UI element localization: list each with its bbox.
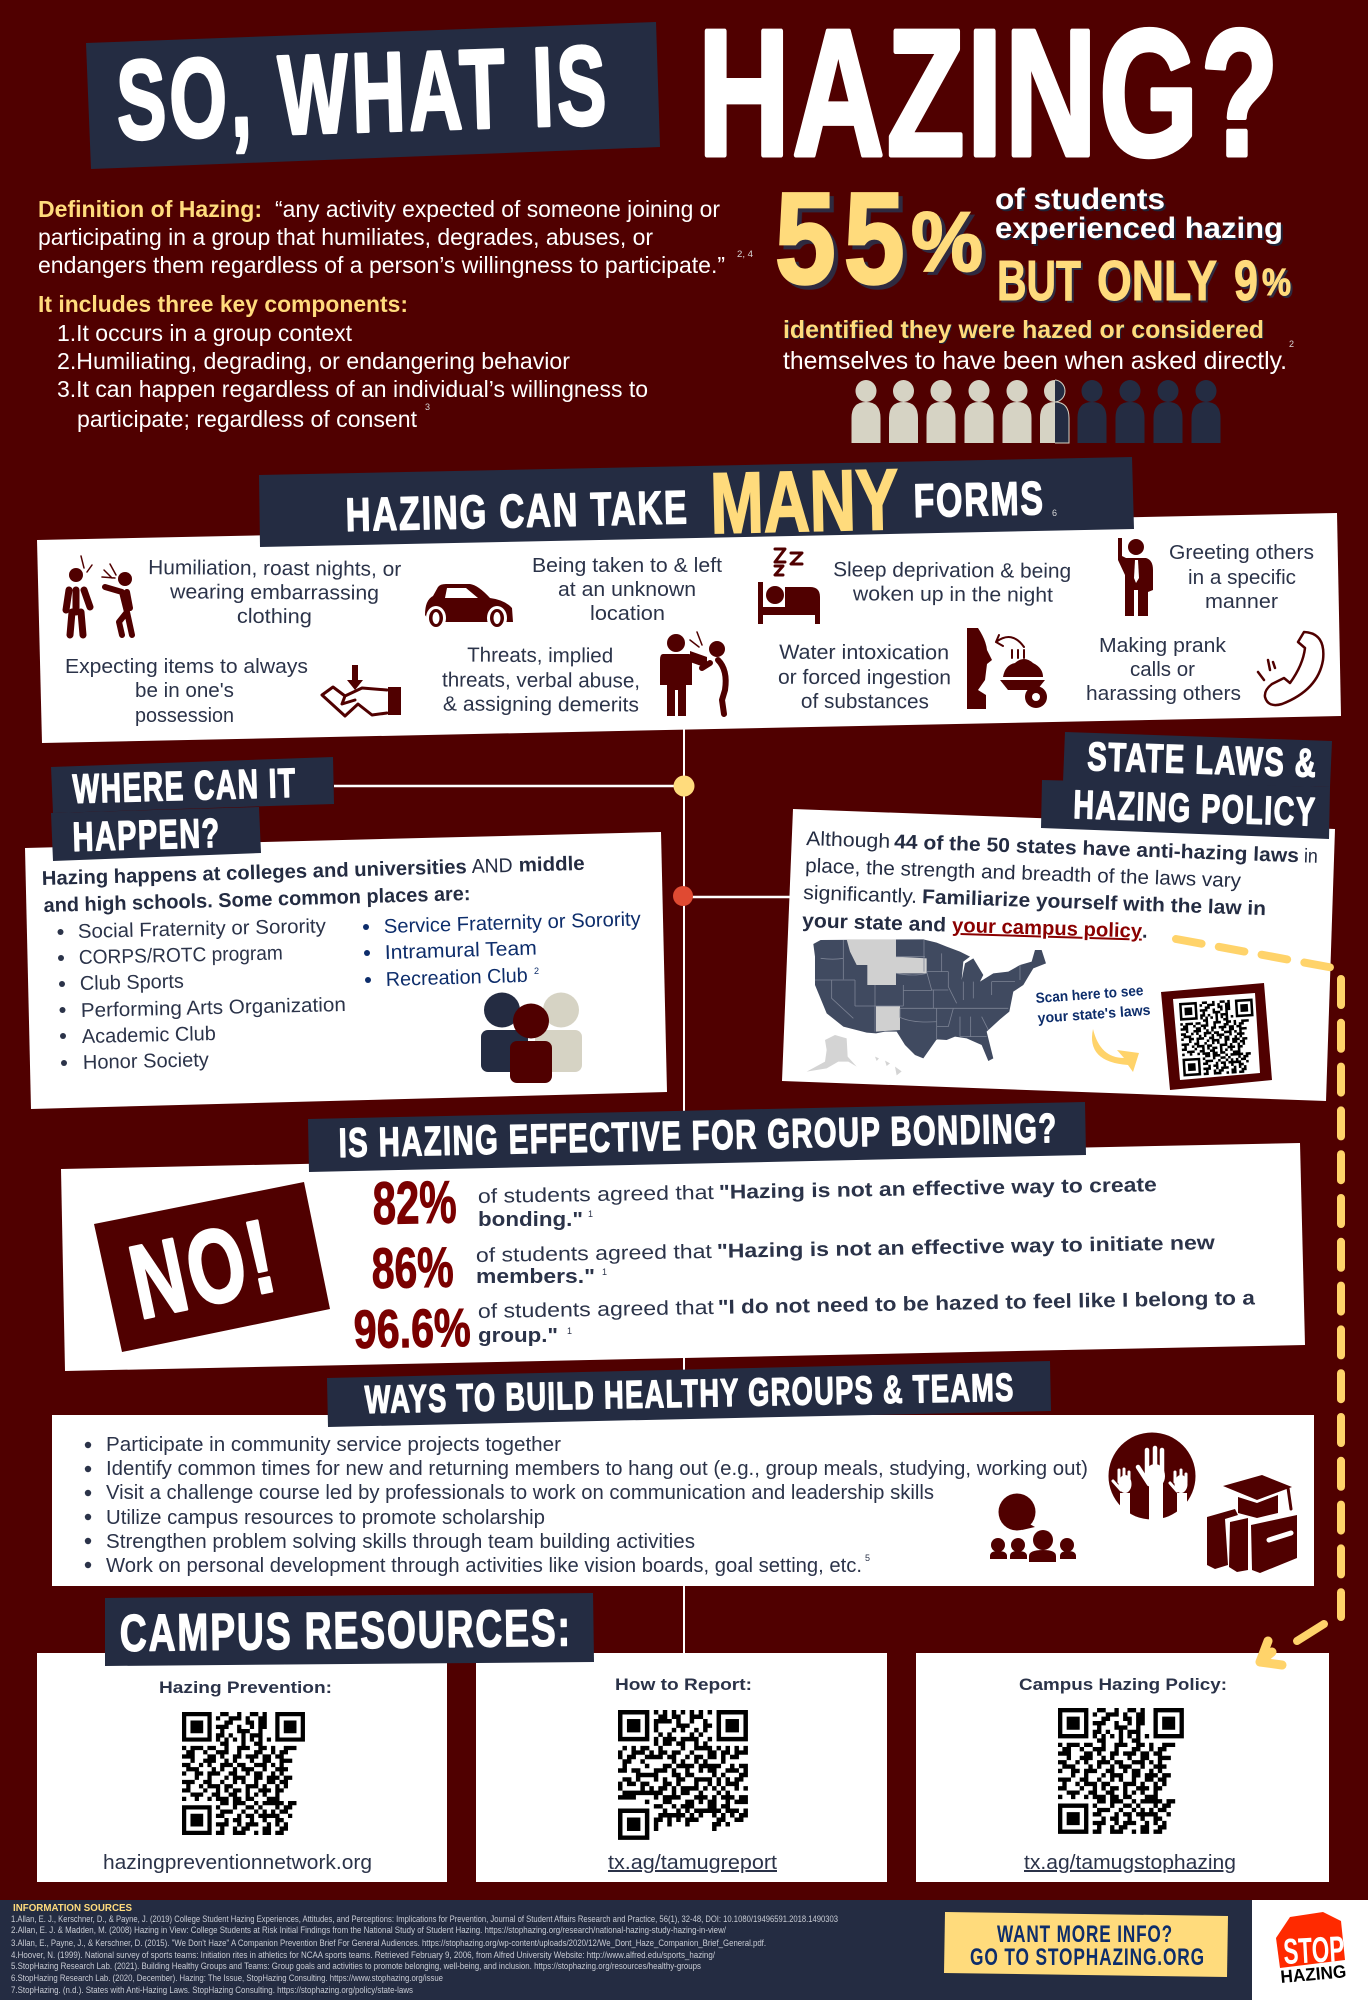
stat: 82 percent <box>372 1169 1157 1237</box>
text: scan prompt: Scan here to see <box>1035 983 1144 1007</box>
definition text block: participating in a group that humiliates, degrades, abuses, or <box>38 224 653 250</box>
panel: ways to build healthy groups <box>52 1361 1314 1586</box>
footer: information sources: 4.Hoover, N. (1999). National survey of sports teams: Initiation rites in athletics for NCAA sports teams. Retrieved February 9, 2006, from Alfred University Website: http://www.alfred.edu/sports_hazing/ <box>11 1950 715 1961</box>
statistic: 55 percent: 9 <box>1234 249 1258 313</box>
item: threats <box>442 643 640 717</box>
item: possession: Expecting items to always <box>65 655 308 678</box>
intro text <box>42 853 586 917</box>
item: sleep deprivation: woken up in the night <box>852 582 1053 607</box>
item: greeting: manner <box>1205 590 1278 613</box>
icon: person with megaphone <box>660 632 726 716</box>
definition text block <box>38 196 753 432</box>
card: hazing prevention: Hazing Prevention: <box>159 1678 332 1697</box>
body text: significantly. <box>803 882 918 908</box>
icon: telephone <box>1258 632 1323 705</box>
list: healthy group ideas <box>85 1434 1088 1577</box>
list: common places left: Honor Society <box>83 1049 209 1074</box>
item: humiliation <box>148 556 401 629</box>
list: common places right: 2 <box>534 966 539 976</box>
heading: where can it happen <box>51 757 334 861</box>
item: humiliation: Humiliation, roast nights, or <box>148 556 401 581</box>
callout: want more info <box>944 1912 1228 1977</box>
body text: your campus policy <box>952 915 1143 943</box>
item: possession: possession <box>135 704 234 727</box>
list: healthy group ideas: Work on personal development through activities like vision boards, goal setting, etc. <box>106 1555 862 1577</box>
icon: arguing people <box>66 556 132 635</box>
heading: healthy groups: WAYS TO BUILD HEALTHY GROUPS & TEAMS <box>364 1367 1015 1422</box>
item: threats: Threats, implied <box>467 644 613 667</box>
body text: 44 of the 50 states have anti-hazing laws <box>894 831 1299 867</box>
intro text: Hazing happens at colleges and universities <box>42 856 467 890</box>
card: hazing prevention <box>37 1653 447 1882</box>
list: common places left: Performing Arts Organization <box>81 994 346 1022</box>
list: common places right: Intramural Team <box>384 937 537 964</box>
item: water intoxication: or forced ingestion <box>778 666 951 689</box>
icon: raised hands <box>1108 1432 1196 1526</box>
list: common places right <box>363 908 641 991</box>
heading: state laws <box>1041 732 1332 839</box>
panel: is hazing effective <box>61 1102 1305 1371</box>
icon: speech bubble and group <box>990 1494 1076 1562</box>
heading: many forms: 6 <box>1052 508 1057 518</box>
stat: 96.6 percent: group." <box>478 1325 558 1347</box>
stat: 86 percent <box>371 1232 1215 1301</box>
footer: information sources <box>0 1900 1252 2000</box>
item: prank calls <box>1086 634 1241 705</box>
icon: graduation cap and books <box>1207 1475 1297 1573</box>
stat: 86 percent: 86% <box>371 1236 454 1301</box>
heading: campus resources <box>105 1593 594 1666</box>
heading: many forms: MANY <box>709 452 899 552</box>
item: unknown location: at an unknown <box>558 578 696 601</box>
stat: 96.6 percent: 1 <box>567 1326 572 1336</box>
icon: forced ingestion <box>967 628 1047 709</box>
item: water intoxication: Water intoxication <box>779 641 949 664</box>
panel: where can it happen <box>25 757 667 1109</box>
body text: place, the strength and breadth of the laws vary <box>805 855 1241 892</box>
intro text: middle <box>518 853 585 877</box>
item: water intoxication <box>778 641 951 713</box>
item: prank calls: harassing others <box>1086 682 1241 705</box>
stat: 96.6 percent: 96.6% <box>353 1298 471 1360</box>
heading: many forms <box>259 452 1134 552</box>
item: greeting: in a specific <box>1188 566 1296 589</box>
footer: information sources: 2.Allan, E. J. & Madden, M. (2008) Hazing in View: College Students at Risk Initial Findings from the National Study of Student Hazing. https://stophazing.org/research/national-hazing-study-hazing-in-view/ <box>11 1925 726 1936</box>
statistic: 55 percent: % <box>911 195 983 289</box>
stat: 82 percent: 1 <box>588 1209 593 1219</box>
card: campus hazing policy <box>916 1653 1329 1882</box>
statistic: 55 percent: experienced hazing <box>995 212 1283 245</box>
footer: information sources: 1.Allan, E. J., Kerschner, D., & Payne, J. (2019) College Student Hazing Experiences, Attitudes, and Perceptions: Implications for Prevention, Journal of Student Affairs Research and Practice, 56(1), 32-48, DOI: 10.1080/19496591.2018.1490303 <box>11 1914 838 1925</box>
heading: many forms: FORMS <box>913 471 1045 527</box>
statistic: 55 percent <box>775 166 1294 375</box>
panel: campus resources <box>37 1593 1329 1882</box>
statistic: 55 percent: themselves to have been when asked directly. <box>783 347 1287 375</box>
item: humiliation: wearing embarrassing <box>169 580 379 605</box>
heading: campus resources: CAMPUS RESOURCES: <box>119 1599 572 1663</box>
card: hazing prevention: hazingpreventionnetwork.org <box>103 1852 372 1874</box>
footer: information sources: 5.StopHazing Research Lab. (2021). Building Healthy Groups and Teams: Group goals and activities to promote belonging, well-being, and inclusion. https://stophazing.org/resources/healthy-groups <box>11 1961 701 1972</box>
list: common places right: Service Fraternity or Sorority <box>383 908 641 938</box>
body text <box>802 828 1318 943</box>
statistic: 55 percent: ONLY <box>1097 249 1217 313</box>
stat: 96.6 percent: "I do not need to be hazed to feel like I belong to a <box>718 1287 1256 1319</box>
card: campus hazing policy: tx.ag/tamugstophazing <box>1024 1852 1236 1874</box>
definition text block: It includes three key components: <box>38 291 408 317</box>
definition text block: participate; regardless of consent <box>77 406 418 432</box>
item: unknown location <box>532 554 722 625</box>
list: common places left: Social Fraternity or Sorority <box>78 915 326 943</box>
text: scan prompt <box>1035 983 1151 1027</box>
card: how to report: tx.ag/tamugreport <box>608 1852 777 1874</box>
item: prank calls: calls or <box>1130 658 1195 681</box>
item: possession: be in one's <box>135 679 234 702</box>
definition text block: Definition of Hazing: <box>38 196 262 222</box>
item: sleep deprivation <box>833 558 1071 607</box>
item: humiliation: clothing <box>237 605 312 628</box>
icon: greeting person <box>1118 538 1153 616</box>
item: greeting <box>1169 541 1314 613</box>
body text: in <box>1304 845 1318 868</box>
intro text: and high schools. Some common places are: <box>43 883 471 917</box>
heading: many forms: HAZING CAN TAKE <box>345 480 689 541</box>
icon: hand receiving <box>322 665 401 716</box>
item: prank calls: Making prank <box>1099 634 1227 657</box>
list: common places left: Club Sports <box>80 971 184 995</box>
item: possession <box>65 655 308 727</box>
list: healthy group ideas: Participate in community service projects together <box>106 1434 561 1456</box>
icon: bed with zzz <box>758 549 820 624</box>
stat: 82 percent: 82% <box>372 1169 457 1237</box>
icon: car <box>425 584 513 630</box>
timeline dot: red <box>673 886 693 906</box>
heading: group bonding: IS HAZING EFFECTIVE FOR GROUP BONDING? <box>338 1105 1058 1166</box>
body text: Although <box>806 828 891 853</box>
stat: 86 percent: 1 <box>602 1267 607 1277</box>
definition text block: 2, 4 <box>737 249 753 259</box>
item: threats: threats, verbal abuse, <box>442 668 640 693</box>
statistic: 55 percent: 55 <box>775 166 905 311</box>
list: healthy group ideas: Visit a challenge course led by professionals to work on communication and leadership skills <box>106 1482 934 1504</box>
stat: 96.6 percent: of students agreed that <box>478 1297 715 1323</box>
statistic: 55 percent: identified they were hazed or considered <box>783 316 1264 344</box>
title <box>86 0 1281 194</box>
item: threats: & assigning demerits <box>443 692 639 717</box>
statistic: 55 percent: BUT <box>997 249 1081 313</box>
list: healthy group ideas: Identify common times for new and returning members to hang out (e.g., group meals, studying, working out) <box>106 1458 1088 1480</box>
card: how to report <box>476 1653 887 1882</box>
list: healthy group ideas: Utilize campus resources to promote scholarship <box>106 1507 545 1529</box>
icon: ten people pictogram <box>852 380 1220 443</box>
logo: stop hazing <box>1252 1900 1368 2000</box>
stat: 82 percent: "Hazing is not an effective way to create <box>719 1174 1157 1204</box>
intro text: AND <box>471 855 513 878</box>
list: common places left <box>58 915 346 1074</box>
definition text block: 1.It occurs in a group context <box>57 320 353 346</box>
logo: stop hazing: HAZING <box>1280 1961 1347 1987</box>
card: how to report: How to Report: <box>615 1675 752 1694</box>
callout: want more info: WANT MORE INFO? <box>997 1921 1173 1948</box>
stat: 86 percent: of students agreed that <box>476 1241 713 1267</box>
footer: information sources: INFORMATION SOURCES <box>13 1903 132 1914</box>
map: united states <box>807 939 1046 1075</box>
statistic: 55 percent: of students <box>995 183 1165 216</box>
statistic: 55 percent: % <box>1262 262 1291 304</box>
list: healthy group ideas: 5 <box>865 1553 870 1563</box>
panel: state laws and hazing policy <box>782 732 1335 1101</box>
icon: three people <box>481 992 582 1083</box>
connector lines <box>334 716 795 1660</box>
item: sleep deprivation: Sleep deprivation & being <box>833 558 1071 583</box>
text: scan prompt: your state's laws <box>1037 1003 1151 1027</box>
item: unknown location: location <box>590 602 665 625</box>
definition text block: 3.It can happen regardless of an individual’s willingness to <box>57 376 648 402</box>
definition text block: endangers them regardless of a person’s willingness to participate.” <box>38 252 725 278</box>
heading: group bonding <box>308 1102 1086 1172</box>
list: common places right: Recreation Club <box>385 965 528 991</box>
definition text block: 2.Humiliating, degrading, or endangering behavior <box>57 348 570 374</box>
card: campus hazing policy: Campus Hazing Policy: <box>1019 1675 1227 1694</box>
list: common places left: Academic Club <box>82 1023 216 1048</box>
heading: where can it happen: HAPPEN? <box>72 810 221 860</box>
stat: 86 percent: "Hazing is not an effective way to initiate new <box>717 1232 1215 1263</box>
qr code: state laws <box>1161 983 1272 1090</box>
stat: 82 percent: of students agreed that <box>478 1182 715 1208</box>
timeline dot: yellow <box>674 776 694 796</box>
item: unknown location: Being taken to & left <box>532 554 722 577</box>
body text: Familiarize yourself with the law in <box>922 886 1266 920</box>
callout: want more info: GO TO STOPHAZING.ORG <box>970 1944 1205 1971</box>
footer: information sources: 6.StopHazing Research Lab. (2020, December). Hazing: The Issue, StopHazing Consulting. https://www.stophazing.org/issue <box>11 1973 443 1984</box>
footer: information sources: 3.Allan, E., Payne, J., & Kerschner, D. (2015). "We Don't Haze" A Companion Prevention Brief For General Audiences. https://stophazing.org/wp-content/uploads/2020/12/We_Dont_Haze_Companion_Brief_General.pdf. <box>11 1938 766 1949</box>
panel: hazing can take many forms <box>37 452 1341 743</box>
definition text block: 3 <box>425 402 430 412</box>
statistic: 55 percent: 2 <box>1289 339 1294 349</box>
arrow: curved yellow <box>1092 1029 1139 1072</box>
item: greeting: Greeting others <box>1169 541 1314 564</box>
body text: your state and <box>802 910 946 937</box>
definition text block: “any activity expected of someone joining or <box>275 196 720 222</box>
footer: information sources: 7.StopHazing. (n.d.). States with Anti-Hazing Laws. StopHazing Consulting. https://stophazing.org/policy/state-laws <box>11 1985 413 1996</box>
callout: no: NO! <box>121 1198 288 1341</box>
list: healthy group ideas: Strengthen problem solving skills through team building activities <box>106 1531 695 1553</box>
body text: . <box>1142 921 1148 943</box>
heading: healthy groups <box>327 1361 1051 1427</box>
dashed arrow path <box>1176 939 1341 1665</box>
list: common places left: CORPS/ROTC program <box>79 942 283 969</box>
title: SO, WHAT IS <box>115 23 612 163</box>
stat: 82 percent: bonding." <box>478 1209 583 1231</box>
stat: 86 percent: members." <box>476 1266 595 1288</box>
item: water intoxication: of substances <box>801 690 929 713</box>
heading: where can it happen: WHERE CAN IT <box>72 760 297 812</box>
stat: 96.6 percent <box>353 1287 1256 1360</box>
